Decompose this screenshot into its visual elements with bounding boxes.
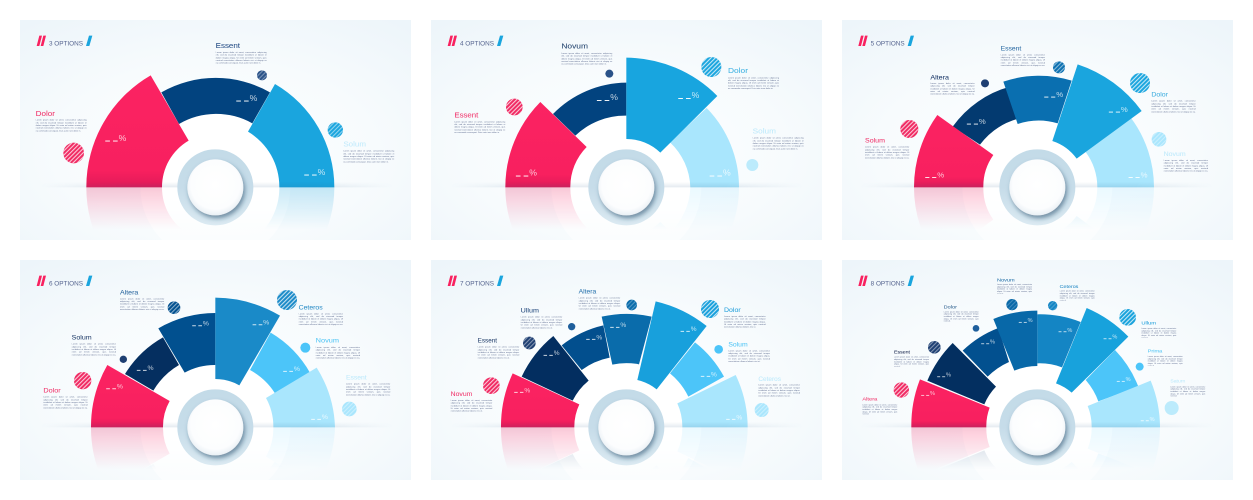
label: Dolor: Dolor — [728, 66, 749, 75]
label: Dolor — [36, 109, 87, 135]
percent labels: % — [250, 93, 258, 103]
label: Novum — [451, 391, 492, 413]
percent labels: % — [930, 391, 935, 397]
icon: hatched circles — [63, 70, 343, 163]
label: Prima — [1148, 349, 1183, 366]
center ring and disc — [177, 389, 253, 465]
label: Saturn: Saturn — [1170, 379, 1186, 385]
label: Dolor: Dolor — [43, 388, 62, 395]
percent labels: % — [119, 133, 127, 143]
percent labels: % — [736, 415, 742, 422]
header — [37, 36, 92, 48]
percent labels: – – — [1103, 336, 1112, 342]
center ring and disc — [999, 389, 1075, 465]
percent labels: % — [1141, 170, 1148, 179]
label: Essent: Essent — [894, 349, 911, 355]
percent labels: % — [596, 335, 602, 342]
percent labels: % — [620, 322, 626, 329]
percent labels: – – — [137, 365, 147, 374]
label: Altera: Altera — [120, 289, 139, 296]
percent labels: % — [610, 92, 618, 102]
label: Essent: Essent — [454, 110, 478, 119]
percent labels: – – — [925, 172, 937, 182]
label: Altera: Lorem ipsum dolor sit amet, consectetur adipiscing elit, sed do eiusmod tempor incididunt ut labore et dolore magna aliqua. Ut enim ad minim veniam, quis nostrud exercitation ullamco laboris nisi ut aliquip ex ea. — [120, 298, 164, 311]
percent labels: – – — [304, 170, 317, 180]
percent labels: – – — [283, 366, 293, 375]
label: Altera — [930, 74, 975, 96]
label: Dolor: Lorem ipsum dolor sit amet, consectetur adipiscing elit, sed do eiusmod tempor incididunt ut labore et dolore magna aliqua. Ut enim ad minim veniam, quis nostrud exercitation ullamco laboris nisi ut aliquip ex ea commodo consequat. Duis aute irure dolor in. — [728, 77, 779, 90]
percent labels: % — [318, 167, 326, 177]
label: Ceteros: Ceteros — [1060, 284, 1079, 290]
percent labels: – – — [678, 93, 691, 103]
center ring and disc — [588, 149, 664, 225]
label: Essent: Essent — [216, 41, 240, 50]
percent labels: % — [692, 90, 700, 100]
label: Novum: Lorem ipsum dolor sit amet, consectetur adipiscing elit, sed do eiusmod tempor incididunt ut labore et dolore magna aliqua. Ut enim ad minim veniam, quis nostrud exercitation ullamco laboris nisi ut aliquip ex ea. — [316, 346, 360, 359]
panel: 8 options — [842, 260, 1233, 480]
percent labels — [925, 90, 1148, 182]
label: Dolor: Lorem ipsum dolor sit amet, consectetur adipiscing elit, sed do eiusmod tempor incididunt ut labore et dolore magna aliqua. Ut enim ad minim veniam, quis nostrud exercitation ullamco laboris nisi ut aliquip ex ea. — [43, 396, 88, 409]
label: Novum: Lorem ipsum dolor sit amet, consectetur adipiscing elit, sed do eiusmod tempor incididunt ut labore et dolore magna aliqua. Ut enim ad minim veniam, quis nostrud exercitation ullamco laboris nisi ut aliquip ex ea commodo consequat. Duis aute irure dolor in. — [561, 52, 612, 65]
wedge chart — [914, 64, 1154, 187]
panel: 3 options — [20, 20, 411, 240]
reflection base — [551, 187, 701, 240]
percent labels: – – — [1044, 91, 1056, 101]
label: Ceteros — [1060, 284, 1095, 301]
label: Dolor — [43, 388, 88, 409]
percent labels: – – — [921, 393, 929, 399]
percent labels: – – — [105, 136, 118, 146]
wedge chart — [91, 298, 335, 427]
label: Essent — [894, 349, 929, 367]
label: Solum — [728, 342, 770, 363]
icon: circles — [483, 300, 769, 417]
label: Ullum — [521, 308, 562, 329]
label: Solum: Solum — [865, 138, 885, 145]
label: Essent: Lorem ipsum dolor sit amet, consectetur adipiscing elit, sed do eiusmod tempor incididunt ut labore et dolore magna aliqua. Ut enim ad minim veniam, quis nostrud exercitation ullamco laboris nisi ut aliquip ex ea. — [1001, 54, 1045, 67]
label: Solum: Solum — [728, 342, 748, 349]
label: Solum — [343, 140, 394, 166]
label: Essent: Essent — [1001, 46, 1021, 53]
percent labels: % — [203, 321, 209, 328]
percent labels: – – — [586, 337, 596, 344]
label: Essent — [478, 338, 519, 359]
label: Solum — [753, 126, 804, 153]
label: Prima: Prima — [1148, 349, 1163, 355]
percent labels: – – — [516, 170, 529, 180]
percent labels: – – — [106, 384, 116, 393]
percent labels: – – — [236, 96, 249, 106]
percent labels: – – — [252, 320, 263, 329]
label: Novum: Lorem ipsum dolor sit amet, consectetur adipiscing elit, sed do eiusmod tempor incididunt ut labore et dolore magna aliqua. Ut enim ad minim veniam, quis nostrud exercitation ullamco laboris nisi ut aliquip ex ea. — [1164, 159, 1208, 172]
percent labels: % — [554, 350, 560, 357]
percent labels: % — [1150, 417, 1155, 423]
percent labels: – – — [1117, 379, 1125, 385]
label: Dolor: Dolor — [36, 109, 56, 118]
percent labels: % — [711, 372, 717, 379]
percent labels — [105, 93, 326, 180]
label: Novum: Novum — [997, 277, 1015, 283]
wedge chart — [501, 301, 748, 427]
label: Novum — [1164, 151, 1208, 173]
percent labels: % — [990, 339, 995, 345]
header: 3 OPTIONS — [49, 41, 83, 48]
label: Ceteros: Ceteros — [758, 376, 781, 383]
percent labels: – – — [701, 374, 710, 381]
percent labels: % — [1028, 318, 1033, 324]
percent labels: – – — [726, 417, 736, 424]
icon: circles — [894, 299, 1179, 415]
header: 6 OPTIONS — [49, 281, 83, 288]
label: Solum: Solum — [72, 334, 92, 341]
label: Novum: Novum — [1164, 151, 1186, 158]
center ring and disc — [177, 149, 253, 225]
header: 7 OPTIONS — [460, 281, 494, 288]
label: Novum: Novum — [451, 391, 472, 398]
label: Dolor — [1151, 92, 1196, 113]
percent labels: % — [1056, 90, 1063, 99]
percent labels: % — [937, 170, 944, 179]
label: Ullum: Lorem ipsum dolor sit amet, consectetur adipiscing elit, sed do eiusmod tempor incididunt ut labore et dolore magna aliqua. Ut enim ad minim veniam, quis nostrud exercitation ullamco laboris nisi ut. — [521, 316, 562, 329]
label: Altera: Altera — [579, 288, 597, 295]
label: Essent — [216, 41, 267, 67]
percent labels: – – — [1109, 107, 1120, 117]
header: 8 OPTIONS — [871, 281, 905, 288]
percent labels: % — [263, 320, 269, 327]
panel: 4 options — [431, 20, 822, 240]
label: Ceteros: Lorem ipsum dolor sit amet, consectetur adipiscing elit, sed do eiusmod tempor incididunt ut labore et dolore magna aliqua. Ut enim ad minim veniam, quis nostrud exercitation ullamco laboris nisi ut aliquip ex ea. — [299, 313, 343, 326]
label: Ceteros: Lorem ipsum dolor sit amet, consectetur adipiscing elit, sed do eiusmod tempor incididunt ut labore et dolore magna aliqua. Ut enim ad minim veniam, quis nostrud exercitation ullamco laboris nisi ut. — [758, 384, 800, 397]
percent labels: % — [148, 365, 154, 372]
label: Ceteros — [758, 376, 800, 397]
label: Altera: Altera — [930, 74, 949, 81]
percent labels: % — [322, 414, 328, 421]
reflection base — [551, 427, 701, 480]
percent labels: – – — [1128, 172, 1140, 182]
label: Dolor: Dolor — [724, 307, 741, 314]
label: Ceteros — [299, 304, 343, 326]
reflection base — [962, 427, 1112, 480]
label: Novum: Novum — [561, 42, 588, 51]
label: Ceteros: Ceteros — [299, 304, 323, 311]
label: Solum: Lorem ipsum dolor sit amet, consectetur adipiscing elit, sed do eiusmod tempor incididunt ut labore et dolore magna aliqua. Ut enim ad minim veniam, quis nostrud exercitation ullamco laboris nisi ut aliquip ex ea commodo consequat. Duis aute irure dolor in. — [343, 150, 394, 163]
label: Essent: Lorem ipsum dolor sit amet, consectetur adipiscing elit, sed do eiusmod tempor incididunt ut labore et dolore magna aliqua. Ut enim ad minim veniam, quis nostrud exercitation ullamco laboris nisi ut. — [478, 346, 519, 359]
reflection of wedges — [505, 188, 739, 223]
header — [448, 36, 503, 48]
percent labels: – – — [597, 95, 610, 105]
label: Ullum: Ullum — [521, 308, 539, 315]
percent labels: % — [294, 366, 300, 373]
label: Essent: Essent — [346, 374, 367, 381]
header — [858, 276, 914, 288]
label: Novum — [561, 42, 612, 68]
header — [858, 36, 914, 48]
label: Dolor: Lorem ipsum dolor sit amet, consectetur adipiscing elit, sed do eiusmod tempor incididunt ut labore et dolore magna aliqua. Ut enim ad minim veniam, quis nostrud exercitation ullamco laboris nisi ut. — [724, 315, 766, 328]
reflection base — [962, 187, 1112, 240]
wedge chart — [911, 308, 1160, 427]
percent labels: – – — [192, 321, 202, 330]
label: Essent — [1001, 46, 1045, 67]
icon: circles — [900, 61, 1166, 147]
label: Novum — [997, 277, 1032, 294]
percent labels: – – — [981, 341, 989, 347]
label: Solum — [865, 138, 909, 159]
label: Essent — [346, 374, 390, 396]
percent labels: – – — [610, 324, 620, 331]
panel: 6 options — [20, 260, 411, 480]
label: Dolor — [944, 305, 979, 322]
reflection of wedges — [501, 428, 748, 464]
header — [448, 276, 503, 288]
label: Novum: Lorem ipsum dolor sit amet, consectetur adipiscing elit, sed do eiusmod tempor incididunt ut labore et dolore magna aliqua. Ut enim ad minim veniam, quis nostrud exercitation ullamco laboris nisi ut. — [451, 399, 492, 412]
label: Novum: Novum — [316, 338, 339, 345]
percent labels: % — [117, 384, 123, 391]
percent labels: – – — [543, 352, 553, 359]
label: Altera: Lorem ipsum dolor sit amet, consectetur adipiscing elit, sed do eiusmod tempor incididunt ut labore et dolore magna aliqua. Ut enim ad minim veniam, quis nostrud exercitation ullamco laboris nisi ut aliquip ex ea. — [930, 82, 975, 95]
percent labels: – – — [514, 390, 524, 397]
label: Dolor — [728, 66, 779, 93]
percent labels: – – — [1058, 330, 1067, 336]
label: Ullum — [1141, 321, 1176, 338]
reflection base — [140, 187, 290, 240]
percent labels: % — [946, 372, 951, 378]
percent labels: – – — [1141, 419, 1149, 425]
header — [37, 276, 92, 288]
label: Solum — [72, 334, 116, 356]
percent labels: – – — [680, 328, 690, 335]
label: Solum: Lorem ipsum dolor sit amet, consectetur adipiscing elit, sed do eiusmod tempor incididunt ut labore et dolore magna aliqua. Ut enim ad minim veniam, quis nostrud exercitation ullamco laboris nisi ut aliquip ex ea commodo consequat. Duis aute irure dolor in. — [753, 137, 804, 150]
percent labels — [921, 318, 1155, 425]
percent labels: % — [1126, 377, 1131, 383]
percent labels: % — [1067, 328, 1072, 334]
label: Solum: Lorem ipsum dolor sit amet, consectetur adipiscing elit, sed do eiusmod tempor incididunt ut labore et dolore magna aliqua. Ut enim ad minim veniam, quis nostrud exercitation ullamco laboris nisi ut aliquip ex ea. — [72, 343, 116, 356]
reflection of wedges — [911, 428, 1160, 464]
label: Dolor: Lorem ipsum dolor sit amet, consectetur adipiscing elit, sed do eiusmod tempor incididunt ut labore et dolore magna aliqua. Ut enim ad minim veniam, quis nostrud. — [944, 311, 979, 322]
header: 4 OPTIONS — [460, 41, 494, 48]
icon: circles — [506, 57, 758, 171]
reflection of wedges — [914, 188, 1154, 223]
label: Solum: Lorem ipsum dolor sit amet, consectetur adipiscing elit, sed do eiusmod tempor incididunt ut labore et dolore magna aliqua. Ut enim ad minim veniam, quis nostrud exercitation ullamco laboris nisi ut aliquip ex ea. — [865, 146, 909, 159]
reflection of wedges — [91, 428, 335, 463]
percent labels: % — [691, 326, 697, 333]
label: Dolor — [724, 307, 766, 329]
percent labels: – – — [1019, 320, 1027, 326]
icon: circles — [74, 290, 357, 416]
percent labels — [514, 322, 742, 424]
percent labels — [516, 90, 731, 180]
label: Essent: Lorem ipsum dolor sit amet, consectetur adipiscing elit, sed do eiusmod tempor incididunt ut labore et dolore magna aliqua. Ut enim ad minim veniam, quis nostrud exercitation ullamco laboris nisi ut aliquip ex ea. — [346, 383, 390, 396]
percent labels: – – — [967, 119, 978, 129]
label: Essent: Lorem ipsum dolor sit amet, consectetur adipiscing elit, sed do eiusmod tempor incididunt ut labore et dolore magna aliqua. Ut enim ad minim veniam, quis nostrud exercitation ullamco laboris nisi ut aliquip ex ea commodo consequat. Duis aute irure dolor in. — [454, 121, 505, 134]
label: Solum: Lorem ipsum dolor sit amet, consectetur adipiscing elit, sed do eiusmod tempor incididunt ut labore et dolore magna aliqua. Ut enim ad minim veniam, quis nostrud exercitation ullamco laboris nisi ut. — [728, 350, 770, 363]
percent labels: % — [1121, 105, 1128, 114]
percent labels: – – — [937, 374, 945, 380]
panel: 7 options — [431, 260, 822, 480]
label: Saturn — [1170, 379, 1205, 396]
label: Solum: Solum — [343, 140, 366, 149]
center ring and disc — [999, 149, 1075, 225]
reflection base — [140, 427, 290, 480]
percent labels: % — [723, 167, 731, 177]
label: Dolor: Dolor — [944, 305, 957, 311]
label: Dolor: Dolor — [1151, 92, 1169, 99]
reflection of wedges — [86, 188, 334, 223]
label: Dolor: Lorem ipsum dolor sit amet, consectetur adipiscing elit, sed do eiusmod tempor incididunt ut labore et dolore magna aliqua. Ut enim ad minim veniam, quis nostrud exercitation ullamco laboris nisi ut aliquip ex ea. — [1151, 100, 1196, 113]
center ring and disc — [588, 389, 664, 465]
wedge chart — [505, 58, 739, 187]
percent labels: – – — [311, 414, 321, 423]
label: Dolor: Lorem ipsum dolor sit amet, consectetur adipiscing elit, sed do eiusmod tempor incididunt ut labore et dolore magna aliqua. Ut enim ad minim veniam, quis nostrud exercitation ullamco laboris nisi ut aliquip ex ea commodo consequat. Duis aute irure dolor in. — [36, 119, 87, 132]
label: Altera — [120, 289, 164, 311]
percent labels: – – — [709, 170, 722, 180]
percent labels: % — [529, 167, 537, 177]
percent labels: % — [979, 117, 986, 126]
wedge chart — [86, 75, 334, 187]
label: Ullum: Ullum — [1141, 321, 1156, 327]
percent labels: % — [1112, 334, 1117, 340]
panel: 5 options — [842, 20, 1233, 240]
label: Essent: Lorem ipsum dolor sit amet, consectetur adipiscing elit, sed do eiusmod tempor incididunt ut labore et dolore magna aliqua. Ut enim ad minim veniam, quis nostrud exercitation ullamco laboris nisi ut aliquip ex ea commodo consequat. Duis aute irure dolor in. — [216, 51, 267, 64]
label: Altera — [862, 397, 897, 414]
label: Solum: Solum — [753, 126, 776, 135]
label: Altera: Lorem ipsum dolor sit amet, consectetur adipiscing elit, sed do eiusmod tempor incididunt ut labore et dolore magna aliqua. Ut enim ad minim veniam, quis nostrud exercitation ullamco laboris nisi ut. — [579, 297, 620, 310]
percent labels — [106, 320, 328, 423]
label: Altera — [579, 288, 620, 310]
label: Altera: Altera — [862, 397, 878, 403]
header: 5 OPTIONS — [871, 41, 905, 48]
label: Essent: Essent — [478, 338, 497, 345]
percent labels: % — [524, 388, 530, 395]
label: Novum — [316, 338, 360, 360]
label: Essent — [454, 110, 505, 137]
